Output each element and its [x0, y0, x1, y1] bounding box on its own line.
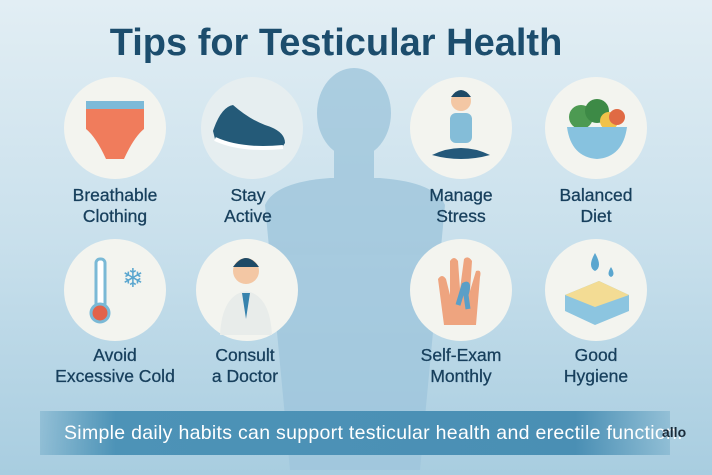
icon: doctor	[196, 239, 298, 341]
tip: consult doctor	[196, 239, 298, 386]
label: Diet	[580, 206, 612, 226]
label: Avoid	[93, 345, 137, 365]
icon: salad bowl	[545, 77, 647, 179]
tip: breathable clothing	[64, 77, 166, 226]
label: Manage	[429, 185, 493, 205]
icon: meditation	[410, 77, 512, 179]
logo: allo: allo	[662, 424, 686, 440]
label: Consult	[215, 345, 275, 365]
tip: stay active	[201, 77, 303, 226]
tip: manage stress	[410, 77, 512, 226]
tip: balanced diet	[545, 77, 647, 226]
label: Stress	[436, 206, 486, 226]
title: Tips for Testicular Health	[110, 22, 562, 64]
label: Self-Exam	[421, 345, 501, 365]
label	[212, 345, 278, 386]
icon: soap	[545, 239, 647, 341]
tip: hygiene	[545, 239, 647, 386]
banner text: Simple daily habits can support testicular health and erectile function.	[64, 422, 683, 444]
label: a Doctor	[212, 366, 278, 386]
label: Good	[575, 345, 617, 365]
label: Monthly	[430, 366, 492, 386]
label	[429, 185, 493, 226]
label	[564, 345, 628, 386]
label: Balanced	[560, 185, 632, 205]
icon: underwear	[64, 77, 166, 179]
label: Excessive Cold	[55, 366, 175, 386]
label	[560, 185, 632, 226]
icon: thermometer: ❄	[122, 263, 144, 293]
label: Stay	[230, 185, 266, 205]
icon: shoe	[201, 77, 303, 179]
label: Hygiene	[564, 366, 628, 386]
label: Breathable	[73, 185, 157, 205]
label: Clothing	[83, 206, 147, 226]
icon: thermometer	[64, 239, 166, 341]
label	[73, 185, 157, 226]
label	[421, 345, 501, 386]
label: Active	[224, 206, 272, 226]
label	[55, 345, 175, 386]
tip: self-exam	[410, 239, 512, 386]
tip: avoid cold	[55, 239, 175, 386]
icon: hand with ribbon	[410, 239, 512, 341]
banner	[40, 411, 670, 455]
label	[224, 185, 272, 226]
